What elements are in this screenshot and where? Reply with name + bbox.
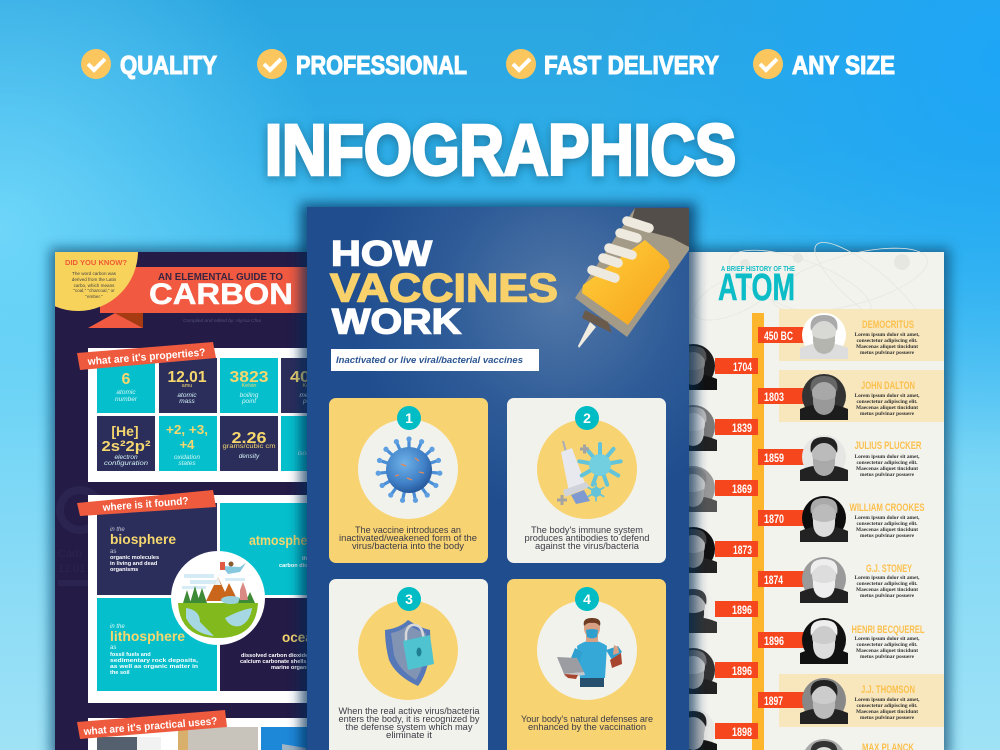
feature: professional: PROFESSIONAL [296, 52, 467, 80]
atmosphere cell: carbon dioxide [279, 563, 319, 569]
entry: democritus: metus pulvinar posuere [860, 350, 914, 356]
lithosphere cell: lithosphere [110, 629, 186, 644]
caption [338, 708, 480, 738]
entry: john dalton: metus pulvinar posuere [860, 411, 914, 417]
label: properties [77, 342, 216, 370]
entry: john dalton: JOHN DALTON [861, 380, 915, 392]
property cells: isotopes [298, 450, 323, 457]
icon: doctor with laptop [557, 618, 622, 687]
entry: henri becquerel: Lorem ipsum dolor sit amet, [854, 636, 920, 642]
photo strip [97, 727, 321, 750]
lithosphere cell [97, 598, 217, 691]
biosphere cell: biosphere [110, 532, 177, 547]
caption: eliminate it [386, 730, 433, 740]
lithosphere cell: in the [110, 624, 125, 630]
caption: The body's immune system [531, 525, 643, 535]
property cells: mass [179, 398, 196, 405]
biosphere cell: in the [110, 527, 125, 533]
feature: any size [753, 49, 895, 80]
label: properties: what are it's properties? [86, 347, 206, 368]
card 1 [329, 398, 488, 563]
caption: virus/bacteria into the body [352, 541, 465, 551]
caption: enters the body, it is recognized by [338, 714, 480, 724]
property cells: configuration [104, 460, 148, 467]
entry: william crookes: metus pulvinar posuere [860, 533, 914, 539]
left year tags: 1869 [732, 482, 752, 496]
oceans cell: calcium carbonate shells [240, 659, 307, 665]
biosphere cell [97, 503, 217, 595]
left year tags [715, 358, 758, 739]
property cells: atomic [177, 392, 197, 399]
left year tags: 1898 [732, 725, 752, 739]
property cells: boiling [240, 392, 259, 399]
entry: g.j. stoney: Lorem ipsum dolor sit amet, [854, 575, 920, 581]
entry: john dalton: Maecenas aliquet tincidunt [856, 405, 918, 411]
property cells: grams/cubic cm [222, 443, 276, 450]
header ribbon: CARBON [149, 278, 293, 311]
lithosphere cell: the soil [110, 670, 130, 676]
entry: democritus: Lorem ipsum dolor sit amet, [854, 332, 920, 338]
entry: g.j. stoney: consectetur adipiscing elit. [856, 581, 918, 587]
main title: INFOGRAPHICS [265, 112, 736, 190]
property cells: oxidation [174, 454, 200, 461]
right year tags: 1896 [764, 634, 784, 648]
icon: virus [375, 436, 443, 503]
property cells: +4 [180, 437, 195, 452]
callout: did you know: The word carbon was [72, 271, 117, 276]
entry: william crookes: WILLIAM CROOKES [850, 502, 924, 514]
entry: william crookes: Lorem ipsum dolor sit amet, [854, 515, 920, 521]
callout: did you know [55, 252, 138, 311]
entry: henri becquerel: Maecenas aliquet tincidunt [856, 648, 918, 654]
atmosphere cell [220, 503, 307, 595]
atmosphere cell: the [302, 556, 310, 562]
left year tags: 1704 [733, 360, 752, 374]
entry: j.j. thomson: Maecenas aliquet tincidunt [856, 709, 918, 715]
faint backdrop element: Carb [58, 548, 82, 560]
entry: henri becquerel: consectetur adipiscing elit. [856, 642, 918, 648]
caption: the defense system which may [346, 722, 473, 732]
subtitle box [331, 349, 539, 371]
callout: did you know: DID YOU KNOW? [65, 258, 127, 267]
right portraits [800, 313, 848, 750]
feature list [81, 49, 895, 80]
entry: j.j. thomson [854, 684, 920, 721]
lithosphere cell: fossil fuels and [110, 652, 151, 658]
entry: g.j. stoney [854, 563, 920, 599]
heading: atom: ATOM [718, 267, 795, 309]
property cells: atomic [116, 389, 136, 396]
heading: atom: A BRIEF HISTORY OF THE [721, 264, 795, 273]
callout: did you know: carbo, which means [74, 283, 115, 288]
highlight bands [779, 309, 944, 727]
number badge: 4 [583, 591, 591, 607]
entry: julius plucker: Maecenas aliquet tincidunt [856, 466, 918, 472]
entry: julius plucker: JULIUS PLUCKER [854, 440, 922, 452]
property cells: 12.01 [168, 369, 207, 386]
icon: syringe [575, 208, 689, 348]
lithosphere cell: sedimentary rock deposits, [110, 658, 199, 664]
card 4 [507, 579, 666, 750]
caption: The vaccine introduces an [355, 525, 461, 535]
card 2 [507, 398, 666, 563]
section: where found [77, 490, 307, 703]
oceans cell [220, 598, 307, 691]
icon: shield and padlock [385, 620, 434, 686]
entry: john dalton [854, 380, 920, 417]
title: HOW [331, 234, 432, 274]
right year tags: 1870 [764, 512, 784, 526]
property cells [97, 358, 307, 471]
entry: g.j. stoney: G.J. STONEY [866, 563, 912, 575]
title: WORK [332, 302, 461, 342]
feature: any size: ANY SIZE [792, 52, 895, 80]
timeline bar [752, 313, 764, 750]
entry: g.j. stoney: metus pulvinar posuere [860, 593, 914, 599]
feature: professional [257, 49, 467, 80]
panel shadows [50, 248, 950, 750]
entry: j.j. thomson: metus pulvinar posuere [860, 715, 914, 721]
caption: inactivated/weakened form of the [339, 533, 477, 543]
entry: julius plucker [854, 440, 922, 478]
entry: henri becquerel [852, 624, 925, 660]
number badge: 1 [405, 410, 413, 426]
right year tags: 1874 [764, 573, 783, 587]
left year tags: 1896 [732, 603, 752, 617]
caption: When the real active virus/bacteria [338, 706, 480, 716]
property cells: electron [114, 454, 138, 461]
property cells: amu [182, 383, 192, 389]
property cells: Kelvin [303, 383, 317, 389]
right year tags: 450 BC [764, 329, 793, 343]
entry: g.j. stoney: Maecenas aliquet tincidunt [856, 587, 918, 593]
property cells: 2s²2p² [102, 438, 150, 455]
main title: INFOGRAPHICS [265, 114, 736, 193]
caption: Your body's natural defenses are [521, 714, 653, 724]
property cells: number [115, 396, 138, 403]
biosphere cell: as [110, 549, 116, 555]
number badge [575, 406, 599, 430]
property cells: [He] [111, 423, 139, 439]
panel: how vaccines work [307, 207, 689, 750]
caption: enhanced by the vaccination [528, 722, 646, 732]
entry: julius plucker: consectetur adipiscing elit. [856, 460, 918, 466]
property cells: +2, +3, [166, 422, 208, 437]
middle panel shadow [300, 203, 696, 750]
entry: j.j. thomson: consectetur adipiscing elit. [856, 703, 918, 709]
header ribbon [88, 267, 315, 328]
icon: globe illustration [171, 551, 265, 645]
callout: did you know: "coal," "charcoal," or [73, 288, 115, 293]
property cells: 2.26 [232, 430, 267, 447]
property cells: states [178, 460, 196, 467]
entry: john dalton: consectetur adipiscing elit. [856, 399, 918, 405]
entry: william crookes: consectetur adipiscing elit. [856, 521, 918, 527]
property cells: point [302, 398, 318, 405]
number badge: 2 [583, 410, 591, 426]
oceans cell: marine organisms [271, 665, 319, 671]
heading: atom [718, 264, 795, 309]
entry: democritus: DEMOCRITUS [862, 319, 914, 331]
property cells: melting [300, 392, 321, 399]
left year tags: 1839 [732, 421, 752, 435]
title [329, 240, 557, 334]
biosphere cell: in living and dead [110, 561, 158, 567]
entry: william crookes: Maecenas aliquet tincidunt [856, 527, 918, 533]
oceans cell: dissolved carbon dioxide [241, 653, 308, 659]
right year tags: 1897 [764, 694, 783, 708]
left year tags: 1896 [732, 664, 752, 678]
number badge [397, 406, 421, 430]
property cells: point [241, 398, 257, 405]
right year tags: 1859 [764, 451, 784, 465]
header ribbon: AN ELEMENTAL GUIDE TO [158, 272, 283, 283]
callout: did you know: derived from the Latin [72, 277, 117, 282]
lithosphere cell: as [110, 645, 116, 651]
number badge [397, 587, 421, 611]
right year tags: 1803 [764, 390, 784, 404]
panel: atom history [669, 230, 944, 750]
left year tags: 1873 [733, 543, 752, 557]
callout: did you know: "ember." [85, 294, 103, 299]
icon: syringe and antibodies [557, 441, 621, 505]
entry: henri becquerel: metus pulvinar posuere [860, 654, 914, 660]
number badge [575, 587, 599, 611]
card 3 [329, 579, 488, 750]
section: properties [77, 342, 307, 482]
entry: democritus: consectetur adipiscing elit. [856, 338, 918, 344]
entry: j.j. thomson: Lorem ipsum dolor sit amet, [854, 697, 920, 703]
feature: fast delivery: FAST DELIVERY [544, 52, 719, 80]
entry: j.j. thomson: J.J. THOMSON [861, 684, 915, 696]
section: practical uses [77, 710, 321, 750]
feature: quality [81, 49, 217, 80]
property cells: density [239, 453, 260, 460]
panel: carbon guide [55, 252, 307, 750]
caption [339, 525, 477, 551]
label: where found: where is it found? [101, 495, 189, 514]
label: uses: what are it's practical uses? [82, 715, 218, 738]
subtitle box: Inactivated or live viral/bacterial vaccines [336, 355, 523, 366]
title: VACCINES [330, 266, 558, 310]
caption: against the virus/bacteria [535, 541, 639, 551]
number badge: 3 [405, 591, 413, 607]
entry: julius plucker: metus pulvinar posuere [860, 472, 914, 478]
feature: fast delivery [506, 49, 719, 80]
atmosphere cell: atmosphere [249, 533, 319, 548]
faint backdrop element: 12.01 [58, 563, 86, 575]
caption [524, 525, 650, 551]
backdrop atom lines [687, 230, 936, 350]
right year tags [758, 327, 804, 708]
biosphere cell: organisms [110, 567, 138, 573]
entry: henri becquerel: HENRI BECQUEREL [852, 624, 925, 636]
property cells: 3823 [230, 369, 269, 386]
entry: democritus: Maecenas aliquet tincidunt [856, 344, 918, 350]
faint backdrop element [58, 490, 100, 586]
entry: william crookes [850, 502, 924, 539]
caption: produces antibodies to defend [524, 533, 650, 543]
biosphere cell: organic molecules [110, 555, 159, 561]
lithosphere cell: as well as organic matter in [110, 664, 199, 670]
entry: julius plucker: Lorem ipsum dolor sit amet, [854, 454, 920, 460]
property cells: 4000 [290, 369, 330, 386]
left portraits [669, 344, 717, 750]
entry: democritus [854, 319, 920, 356]
header ribbon: Compiled and edited by: Alyssa Chui [183, 318, 262, 323]
property cells: 6 [122, 371, 131, 388]
label: where found [77, 490, 216, 516]
caption [521, 714, 653, 732]
feature: quality: QUALITY [120, 52, 217, 80]
oceans cell: oceans [282, 630, 329, 645]
property cells: Kelvin [242, 383, 256, 389]
entry: john dalton: Lorem ipsum dolor sit amet, [854, 393, 920, 399]
